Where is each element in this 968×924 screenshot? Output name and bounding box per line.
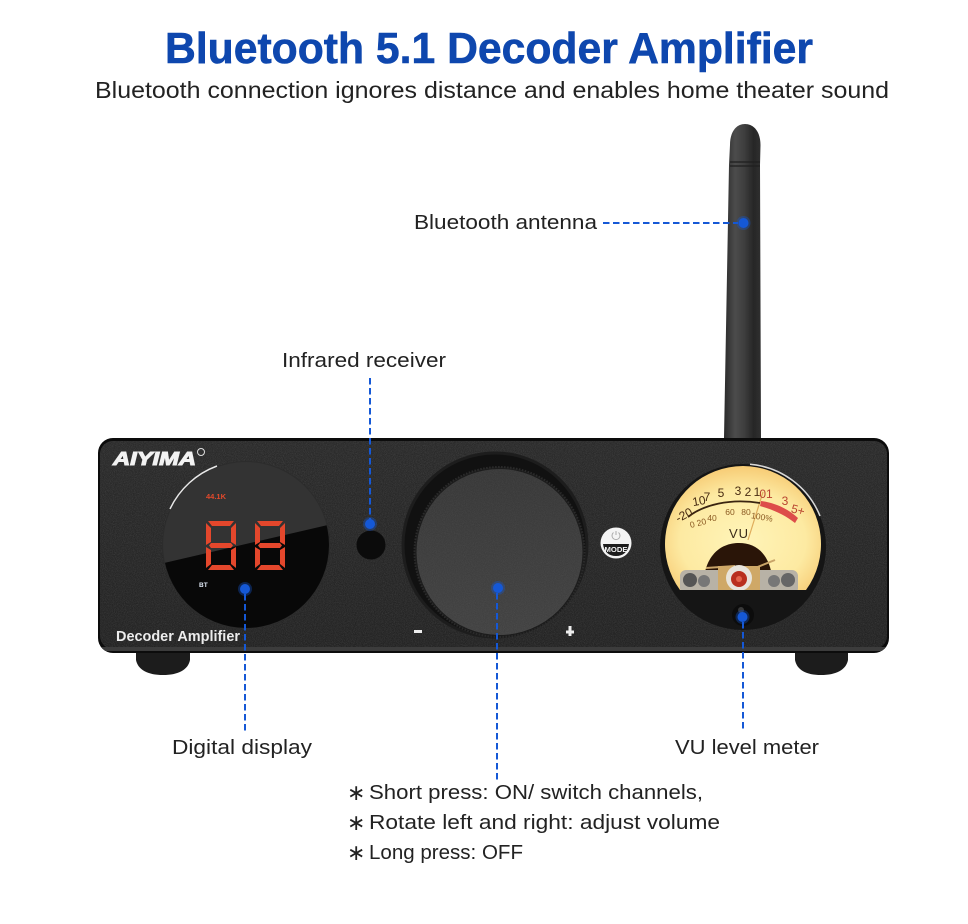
knob usage notes: ∗ [347,840,365,865]
mode button: MODE [604,545,628,554]
knob usage notes: Long press: OFF [369,842,523,864]
infrared receiver window [356,530,386,560]
scale numbers: 2 [745,485,752,499]
callout: Digital display [172,582,312,759]
meter mechanism [680,543,798,594]
icon: right foot [795,650,848,675]
scale arc black [688,501,760,517]
callout: volume knob line [491,581,505,780]
scale numbers: -20 [673,505,695,525]
segment digits [206,521,285,570]
icon: Bluetooth antenna [724,124,761,438]
scale numbers [673,484,806,525]
knob usage notes: ∗ [347,780,365,805]
callout: Bluetooth antenna: Bluetooth antenna [414,212,598,234]
brand logo: AIYIMA [112,449,196,469]
knob usage notes: Short press: ON/ switch channels, [369,782,703,804]
subtitle: Bluetooth connection ignores distance and enables home theater sound [95,77,889,103]
plus label [566,626,574,636]
digital display [160,460,332,632]
scale numbers: 5+ [790,501,806,519]
percent scale: 40 [707,513,717,523]
needle [748,492,763,540]
percent scale: 60 [725,507,735,517]
scale numbers: 7 [704,490,711,504]
minus label [414,630,422,633]
scale numbers: 01 [759,487,773,501]
screw [732,604,754,626]
scale numbers: 10 [691,493,707,509]
percent scale [689,507,774,530]
callout: Infrared receiver [282,350,446,531]
scale numbers: 5 [718,486,725,500]
mode button [600,528,632,558]
percent scale: 100% [750,510,774,524]
knob usage notes [347,780,720,865]
scale numbers: 3 [782,494,789,508]
knob usage notes: ∗ [347,810,365,835]
icon: left foot [136,650,190,675]
scale numbers: 3 [735,484,742,498]
amplifier body [98,438,889,653]
volume knob [403,453,587,637]
callout: Infrared receiver: Infrared receiver [282,350,446,372]
brand logo [112,448,204,469]
sample rate readout: 44.1K [206,492,227,501]
callout: VU level meter: VU level meter [675,737,819,759]
VU level meter [660,464,826,630]
product label: Decoder Amplifier [116,629,240,645]
callout: Digital display: Digital display [172,737,312,759]
VU label: VU [729,526,749,541]
scale arc red [760,501,798,523]
percent scale: 80 [741,507,751,517]
knob usage notes: Rotate left and right: adjust volume [369,812,720,834]
percent scale: 0 20 [689,516,708,530]
scale numbers: 1 [754,485,761,499]
callout: Bluetooth antenna [414,212,750,234]
title: Bluetooth 5.1 Decoder Amplifier [165,24,813,73]
callout: VU level meter [675,610,819,759]
BT label: BT [199,582,208,589]
